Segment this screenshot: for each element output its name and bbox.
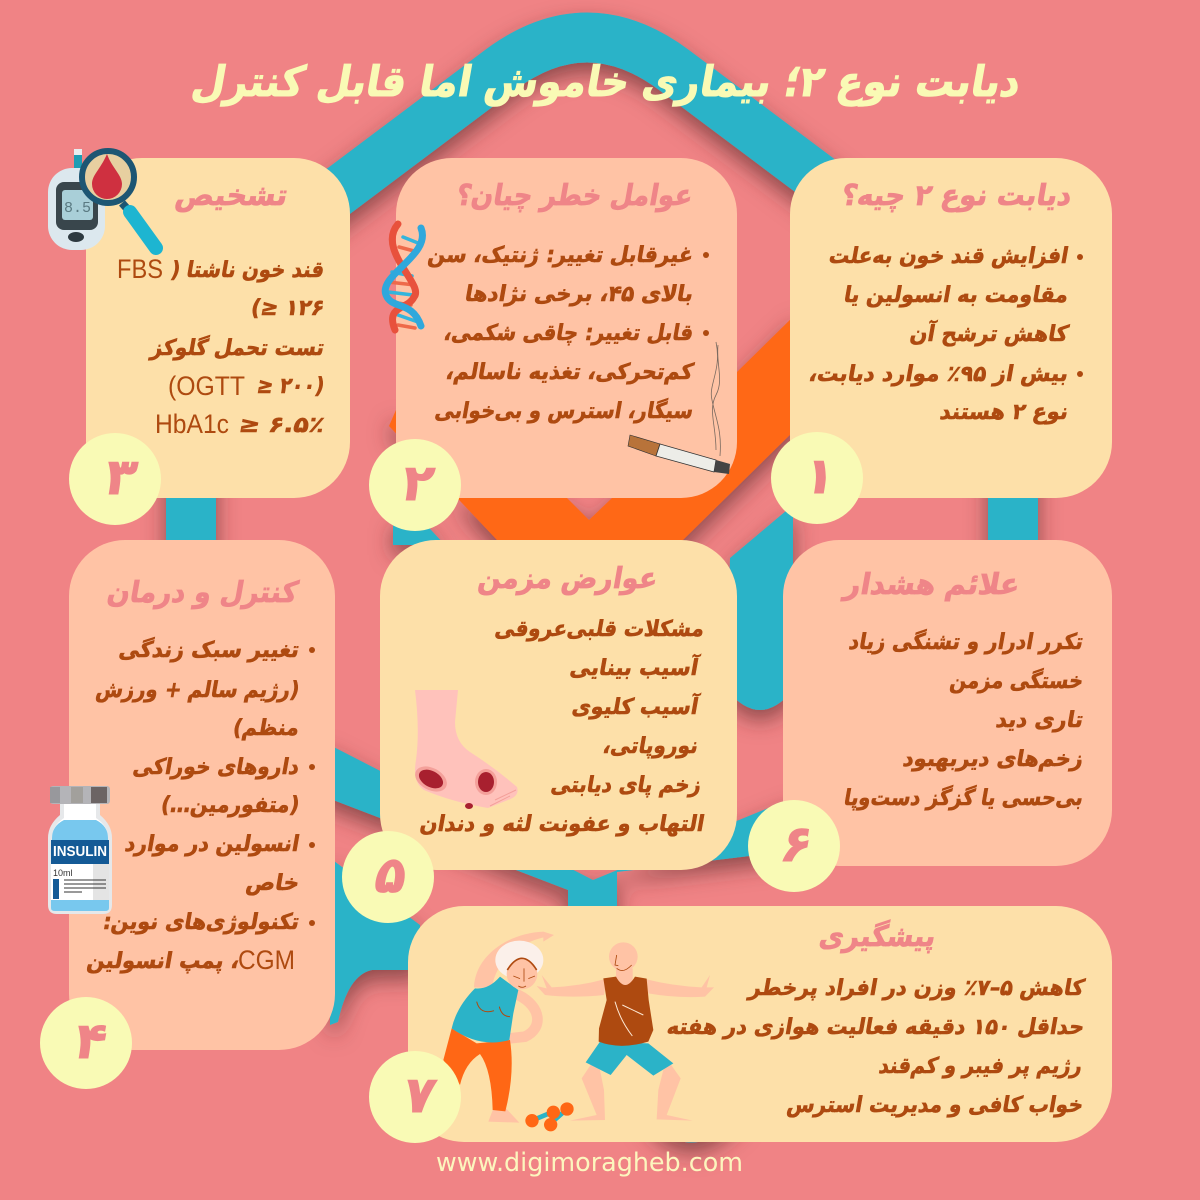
text block: complications list: [418, 616, 706, 837]
icon: glucose meter and magnifier: [48, 149, 156, 250]
text block: treatment bullets: داروهای خوراکی: [131, 754, 301, 780]
badge: number 4: [40, 997, 132, 1089]
text block: risk factor bullets: [426, 242, 709, 424]
text block: treatment bullets: انسولین در موارد: [123, 831, 301, 857]
panel: chronic complications: [342, 540, 737, 923]
text block: complications list: نوروپاتی،: [601, 733, 700, 759]
text block: complications list: آسیب کلیوی: [570, 692, 702, 720]
text block: complications list: التهاب و عفونت لثه و دندان: [418, 811, 706, 837]
badge: number 2: ۲: [398, 453, 439, 512]
heading: warning signs: علائم هشدار: [840, 567, 1023, 601]
text block: treatment bullets: منظم): [231, 715, 301, 741]
icon: cigarette with smoke: [628, 342, 730, 474]
panel: prevention: [369, 906, 1112, 1143]
title: دیابت نوع ۲؛ بیماری خاموش اما قابل کنترل: [188, 57, 1025, 107]
text block: warning signs list: تکرر ادرار و تشنگی زیاد: [847, 628, 1086, 655]
badge: number 5: ۵: [371, 845, 411, 904]
text block: treatment bullets: تغییر سبک زندگی: [117, 636, 302, 663]
background: lower teal bands: [320, 505, 800, 1142]
text block: warning signs list: زخم‌های دیربهبود: [901, 746, 1085, 772]
heading: risk factors: عوامل خطر چیان؟: [454, 178, 696, 213]
badge: number 2: [369, 439, 461, 531]
text block: warning signs list: [842, 628, 1086, 811]
panel: warning signs: [748, 540, 1112, 892]
text block: treatment bullets: CGM: [238, 945, 295, 975]
badge: number 1: [771, 432, 863, 524]
text block: warning signs list: تاری دید: [994, 707, 1085, 733]
icon: diabetic foot: [411, 690, 518, 809]
panel: what is type 2 diabetes: [790, 158, 1112, 498]
text block: definition bullets: کاهش ترشح آن: [908, 319, 1071, 347]
text block: complications list: آسیب بینایی: [568, 653, 702, 681]
text block: diagnostic criteria: HbA1c: [155, 409, 229, 439]
text block: warning signs list: خستگی مزمن: [948, 667, 1086, 694]
badge: number 5: [342, 831, 434, 923]
text block: treatment bullets: (رژیم سالم + ورزش: [94, 677, 301, 703]
badge: number 6: [748, 800, 840, 892]
text block: risk factor bullets: قابل تغییر: چاقی شکمی،: [442, 320, 695, 346]
text block: risk factor bullets: سیگار، استرس و بی‌خوابی: [433, 397, 696, 424]
text block: diagnostic criteria: (۲۰۰ ≤: [255, 373, 326, 399]
text block: warning signs list: بی‌حسی یا گزگز دست‌وپا: [842, 784, 1086, 811]
badge: number 1: ۱: [800, 446, 840, 505]
heading: diagnosis: تشخیص: [173, 178, 291, 212]
text block: complications list: مشکلات قلبی‌عروقی: [493, 616, 706, 642]
text block: treatment bullets: (متفورمین…): [159, 792, 301, 818]
icon: insulin vial: [48, 786, 112, 914]
text block: treatment bullets: [85, 636, 315, 975]
text block: treatment bullets: ، پمپ انسولین: [85, 948, 241, 974]
text block: definition bullets: نوع ۲ هستند: [938, 399, 1070, 425]
panel: diagnosis: [48, 149, 350, 525]
badge: number 7: ۷: [400, 1065, 441, 1124]
text block: diagnostic criteria: ≥ ۶.۵٪: [237, 412, 326, 438]
text block: prevention list: [665, 975, 1087, 1118]
text block: definition bullets: افزایش قند خون به‌علت: [827, 243, 1070, 269]
text block: prevention list: خواب کافی و مدیریت استرس: [785, 1092, 1085, 1118]
text block: risk factor bullets: غیرقابل تغییر: ژنتیک، سن: [426, 242, 695, 268]
text block: diagnostic criteria: [117, 254, 327, 439]
man: [537, 942, 714, 1121]
text block: treatment bullets: تکنولوژی‌های نوین:: [101, 909, 301, 935]
illustration: elderly couple exercising: [443, 932, 714, 1131]
text block: diagnostic criteria: تست تحمل گلوکز: [148, 334, 327, 361]
heading: what is it: دیابت نوع ۲ چیه؟: [839, 178, 1075, 213]
dumbbells: [525, 1102, 574, 1131]
badge: number 3: ۳: [101, 447, 142, 506]
text block: risk factor bullets: بالای ۴۵، برخی نژادها: [463, 281, 695, 307]
heading: control and treatment: کنترل و درمان: [105, 575, 301, 609]
icon: glucose meter and magnifier: 8.5: [64, 200, 91, 217]
text block: definition bullets: [807, 243, 1083, 425]
woman: [443, 932, 554, 1123]
text block: definition bullets: بیش از ۹۵٪ موارد دیابت،: [807, 361, 1070, 387]
text block: definition bullets: مقاومت به انسولین یا: [842, 282, 1070, 308]
text block: complications list: زخم پای دیابتی: [549, 772, 703, 798]
badge: number 6: ۶: [777, 814, 817, 873]
heading: prevention: پیشگیری: [817, 919, 939, 954]
text block: prevention list: کاهش ۵–۷٪ وزن در افراد پرخطر: [746, 975, 1087, 1001]
text block: diagnostic criteria: قند خون ناشتا (: [169, 257, 326, 283]
background: teal hexagon outline: [191, 38, 1013, 780]
text block: prevention list: حداقل ۱۵۰ دقیقه فعالیت هوازی در هفته: [665, 1014, 1086, 1040]
icon: insulin vial: INSULIN: [53, 844, 107, 860]
panel: risk factors: [369, 158, 737, 531]
badge: number 4: ۴: [71, 1011, 111, 1070]
text block: diagnostic criteria: ۱۲۶ ≤): [249, 295, 326, 321]
text block: treatment bullets: خاص: [244, 870, 301, 896]
panel: control and treatment: [40, 540, 335, 1089]
text block: risk factor bullets: کم‌تحرکی، تغذیه ناسالم،: [444, 359, 696, 385]
badge: number 7: [369, 1051, 461, 1143]
text block: diagnostic criteria: FBS: [117, 254, 163, 284]
badge: number 3: [69, 433, 161, 525]
text block: diagnostic criteria: (OGTT: [168, 371, 245, 401]
heading: complications: عوارض مزمن: [476, 561, 661, 595]
text block: prevention list: رژیم پر فیبر و کم‌قند: [877, 1053, 1084, 1079]
icon: DNA helix: [385, 224, 422, 330]
footer website: www.digimoragheb.com: [436, 1148, 743, 1178]
background: orange chevron: [389, 310, 800, 600]
icon: insulin vial: 10ml: [53, 868, 73, 878]
